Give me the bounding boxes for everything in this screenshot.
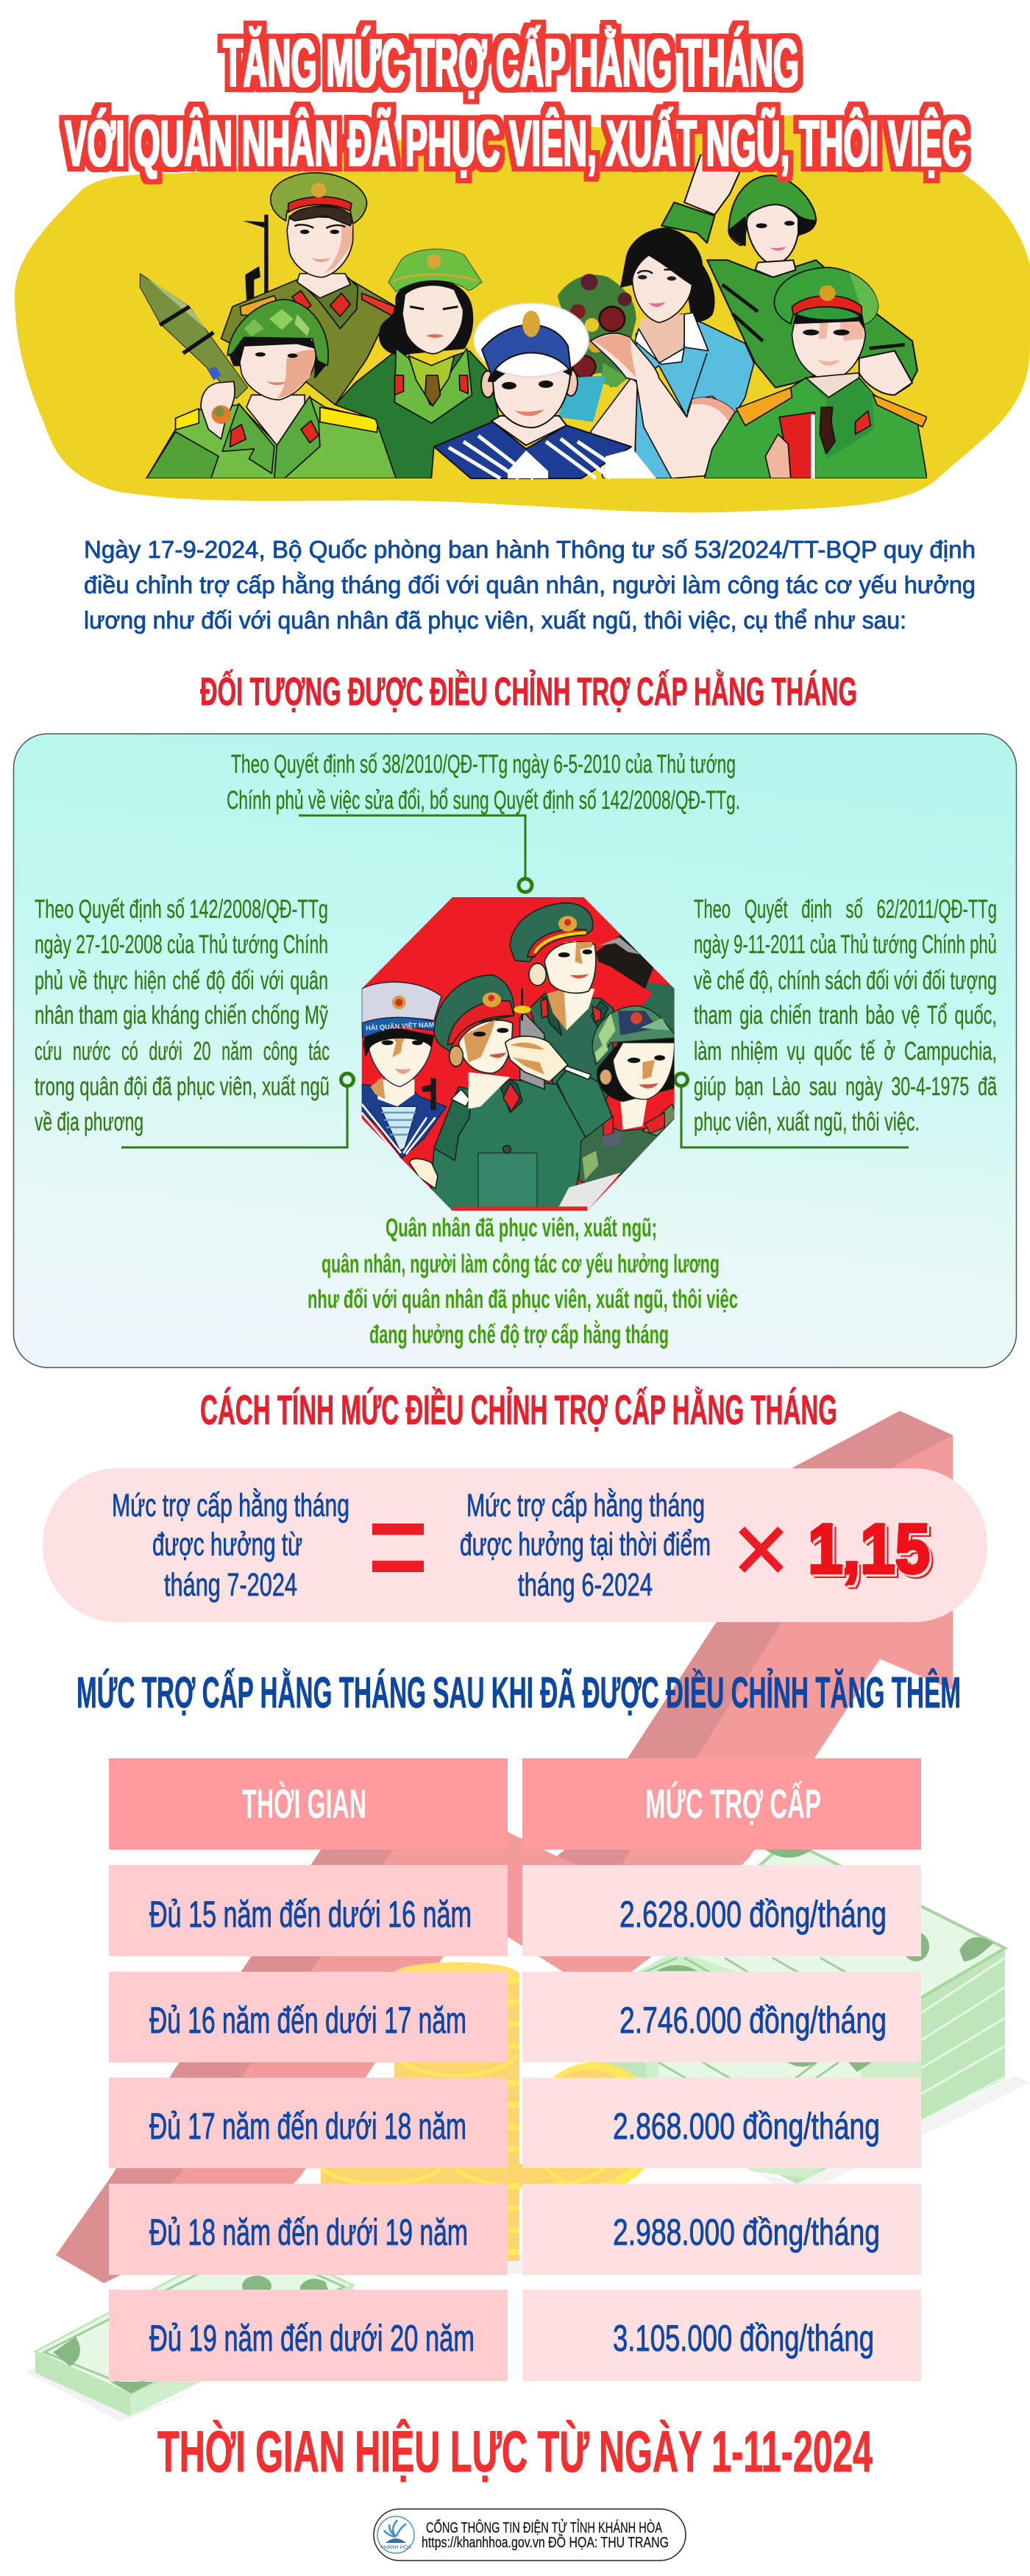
center soldier with radio — [410, 975, 613, 1211]
row 4 — [109, 2184, 921, 2275]
left formula text — [112, 1487, 349, 1603]
row 4: Đủ 18 năm đến dưới 19 năm — [149, 2212, 468, 2253]
soldier with camouflage helmet — [146, 300, 399, 478]
left decision text: phủ về thực hiện chế độ đối với quân — [35, 966, 328, 995]
bouquet of flowers — [558, 274, 636, 388]
multiplier 1,15: 1,15 — [808, 1510, 930, 1588]
intro paragraph — [84, 536, 976, 634]
row 3: Đủ 17 năm đến dưới 18 năm — [149, 2106, 466, 2147]
central subject text: như đối với quân nhân đã phục viên, xuất ngũ, thôi việc — [308, 1285, 738, 1314]
top soldier — [509, 902, 614, 1101]
row 3: 2.868.000 đồng/tháng — [613, 2106, 880, 2147]
officer with red book — [705, 267, 927, 478]
background money stack left — [26, 2237, 353, 2421]
navy sailor: HẢI QUÂN VIỆT NAM — [366, 1020, 435, 1032]
equals sign — [372, 1524, 424, 1572]
central subject text: Quân nhân đã phục viên, xuất ngũ; — [386, 1214, 657, 1242]
connector left — [121, 1073, 353, 1147]
row 5: 3.105.000 đồng/tháng — [613, 2318, 874, 2359]
row 1: Đủ 15 năm đến dưới 16 năm — [149, 1894, 472, 1935]
navy sailor — [362, 982, 447, 1158]
row 5 — [109, 2290, 921, 2381]
central subject text — [308, 1214, 738, 1349]
woman with camo helmet — [579, 1006, 679, 1185]
right formula text: Mức trợ cấp hằng tháng — [466, 1487, 705, 1524]
row 2: 2.746.000 đồng/tháng — [619, 2000, 887, 2041]
footer text — [422, 2519, 669, 2551]
footer credit pill — [374, 2509, 686, 2561]
top decision text — [227, 750, 740, 815]
row 2: Đủ 16 năm đến dưới 17 năm — [149, 2000, 466, 2041]
left decision text: cứu nước có dưới 20 năm công tác — [35, 1037, 330, 1066]
background money stack right — [589, 1840, 1030, 2197]
top decision text: Theo Quyết định số 38/2010/QĐ-TTg ngày 6-5-2010 của Thủ tướng — [231, 750, 736, 779]
background arrow — [56, 1411, 953, 2283]
left decision text: nhân tham gia kháng chiến chống Mỹ — [35, 1001, 328, 1030]
central subject text: quân nhân, người làm công tác cơ yếu hưởng lương — [322, 1250, 720, 1278]
left decision text: về địa phương — [35, 1108, 143, 1136]
intro paragraph: điều chỉnh trợ cấp hằng tháng đối với quân nhân, người làm công tác cơ yếu hưởng — [84, 571, 976, 598]
table header: time: THỜI GIAN — [242, 1780, 366, 1827]
top decision text: Chính phủ về việc sửa đổi, bổ sung Quyết định số 142/2008/QĐ-TTg. — [227, 786, 740, 815]
left formula text: tháng 7-2024 — [164, 1567, 297, 1603]
connector right — [675, 1073, 909, 1147]
title — [65, 25, 966, 180]
table header: amount: MỨC TRỢ CẤP — [645, 1780, 821, 1827]
left decision text: trong quân đội đã phục viên, xuất ngũ — [35, 1072, 330, 1101]
woman in blue shirt — [558, 228, 754, 478]
soldiers left half — [140, 173, 500, 478]
octagon illustration: soldiers on red — [353, 891, 684, 1218]
right decision text: phục viên, xuất ngũ, thôi việc. — [694, 1108, 920, 1136]
rifle — [243, 215, 269, 300]
icon: Khanh Hoa logo — [377, 2516, 414, 2553]
right decision text — [694, 895, 997, 1136]
footer text: CỔNG THÔNG TIN ĐIỆN TỬ TỈNH KHÁNH HÒA — [426, 2519, 662, 2536]
row 4: 2.988.000 đồng/tháng — [613, 2212, 880, 2253]
intro paragraph: lương như đối với quân nhân đã phục viên, xuất ngũ, thôi việc, cụ thể như sau: — [84, 606, 906, 634]
rocket — [140, 274, 248, 399]
row 1: 2.628.000 đồng/tháng — [619, 1894, 887, 1935]
left decision text: ngày 27-10-2008 của Thủ tướng Chính — [35, 930, 328, 959]
table header: amount — [522, 1758, 921, 1850]
intro paragraph: Ngày 17-9-2024, Bộ Quốc phòng ban hành Thông tư số 53/2024/TT-BQP quy định — [84, 536, 976, 563]
officer in olive — [221, 173, 396, 405]
left formula text: Mức trợ cấp hằng tháng — [112, 1487, 349, 1524]
icon: Khanh Hoa logo: KHÁNH HÒA — [380, 2544, 411, 2550]
sailor with white cap — [434, 303, 656, 478]
binoculars and arm — [596, 935, 679, 1047]
paper sheet — [557, 1172, 620, 1211]
right formula text — [460, 1487, 711, 1603]
central subject text: đang hưởng chế độ trợ cấp hằng tháng — [369, 1320, 669, 1349]
row 3 — [109, 2078, 921, 2168]
table — [109, 1758, 921, 2381]
left decision text: Theo Quyết định số 142/2008/QĐ-TTg — [35, 895, 328, 924]
right formula text: được hưởng tại thời điểm — [460, 1526, 711, 1563]
panel: subjects — [13, 734, 1017, 1367]
background gold coins — [321, 1962, 659, 2274]
right formula text: tháng 6-2024 — [518, 1567, 653, 1603]
multiply sign — [742, 1529, 781, 1570]
footer text: https://khanhhoa.gov.vn ĐỒ HỌA: THU TRANG — [422, 2533, 669, 2551]
hero illustration: group of soldiers — [140, 155, 927, 478]
row 5: Đủ 19 năm đến dưới 20 năm — [149, 2318, 475, 2359]
table header: time — [109, 1758, 508, 1850]
left formula text: được hưởng từ — [152, 1526, 302, 1563]
row 1 — [109, 1865, 921, 1956]
left decision text — [35, 895, 330, 1136]
woman soldier waving, in helmet — [661, 155, 917, 395]
woman officer — [335, 249, 500, 478]
formula pill — [43, 1468, 987, 1622]
connector top — [299, 815, 532, 892]
hero yellow blob — [15, 116, 1030, 512]
soldiers right half — [558, 155, 927, 478]
row 2 — [109, 1972, 921, 2062]
